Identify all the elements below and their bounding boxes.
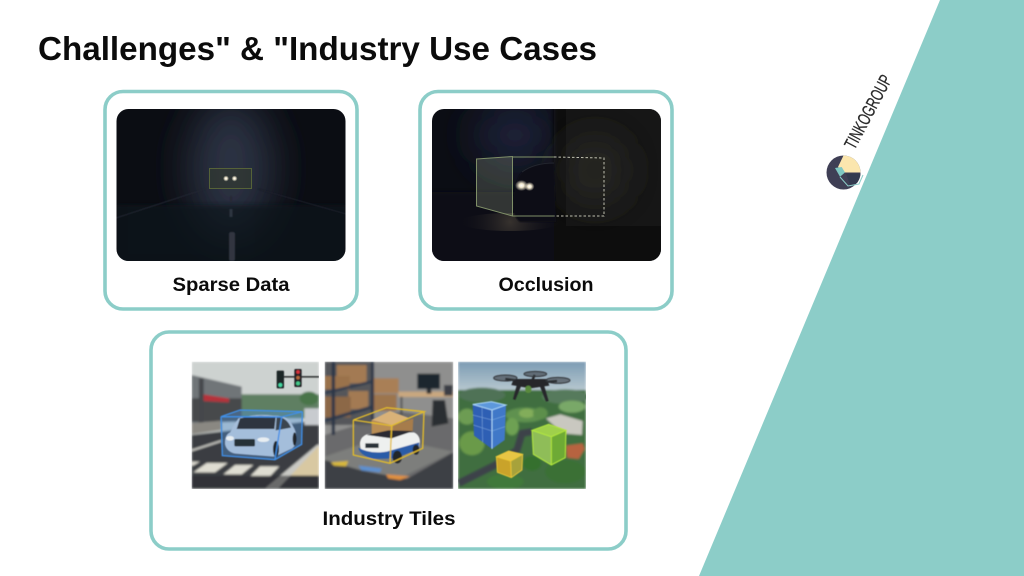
title: Challenges" & "Industry Use Cases bbox=[38, 30, 597, 67]
image: night road with sparse detection bbox=[116, 98, 346, 265]
yellow building box bbox=[496, 451, 523, 478]
tile: street car bbox=[192, 362, 319, 489]
drone bbox=[494, 371, 570, 402]
tile: drone over city bbox=[458, 362, 589, 489]
car with blue bounding box bbox=[221, 410, 302, 460]
traffic lights bbox=[277, 369, 319, 388]
green building box bbox=[532, 424, 566, 465]
3D bounding box bbox=[476, 156, 604, 216]
label: occlusion: Occlusion bbox=[498, 275, 594, 296]
panel: industry tiles bbox=[151, 332, 626, 549]
logo icon bbox=[826, 156, 863, 190]
occluding wall bbox=[552, 109, 661, 261]
robot with yellow bounding box bbox=[353, 408, 424, 463]
logo wordmark: TINKOGROUP bbox=[840, 71, 896, 152]
headlights bbox=[515, 180, 534, 191]
label: sparse data: Sparse Data bbox=[172, 275, 290, 296]
panel: sparse data bbox=[105, 92, 357, 309]
teal diagonal background shape bbox=[699, 0, 1024, 576]
logo: TinkoGroup bbox=[826, 71, 896, 190]
panel: occlusion bbox=[420, 92, 676, 309]
image: occluded car behind wall bbox=[432, 109, 661, 261]
headlights bbox=[223, 176, 238, 182]
label: industry tiles: Industry Tiles bbox=[322, 509, 456, 530]
blue building box bbox=[473, 402, 506, 449]
detection box bbox=[210, 168, 252, 188]
tile: warehouse robot bbox=[325, 362, 453, 489]
car silhouette bbox=[513, 163, 556, 222]
